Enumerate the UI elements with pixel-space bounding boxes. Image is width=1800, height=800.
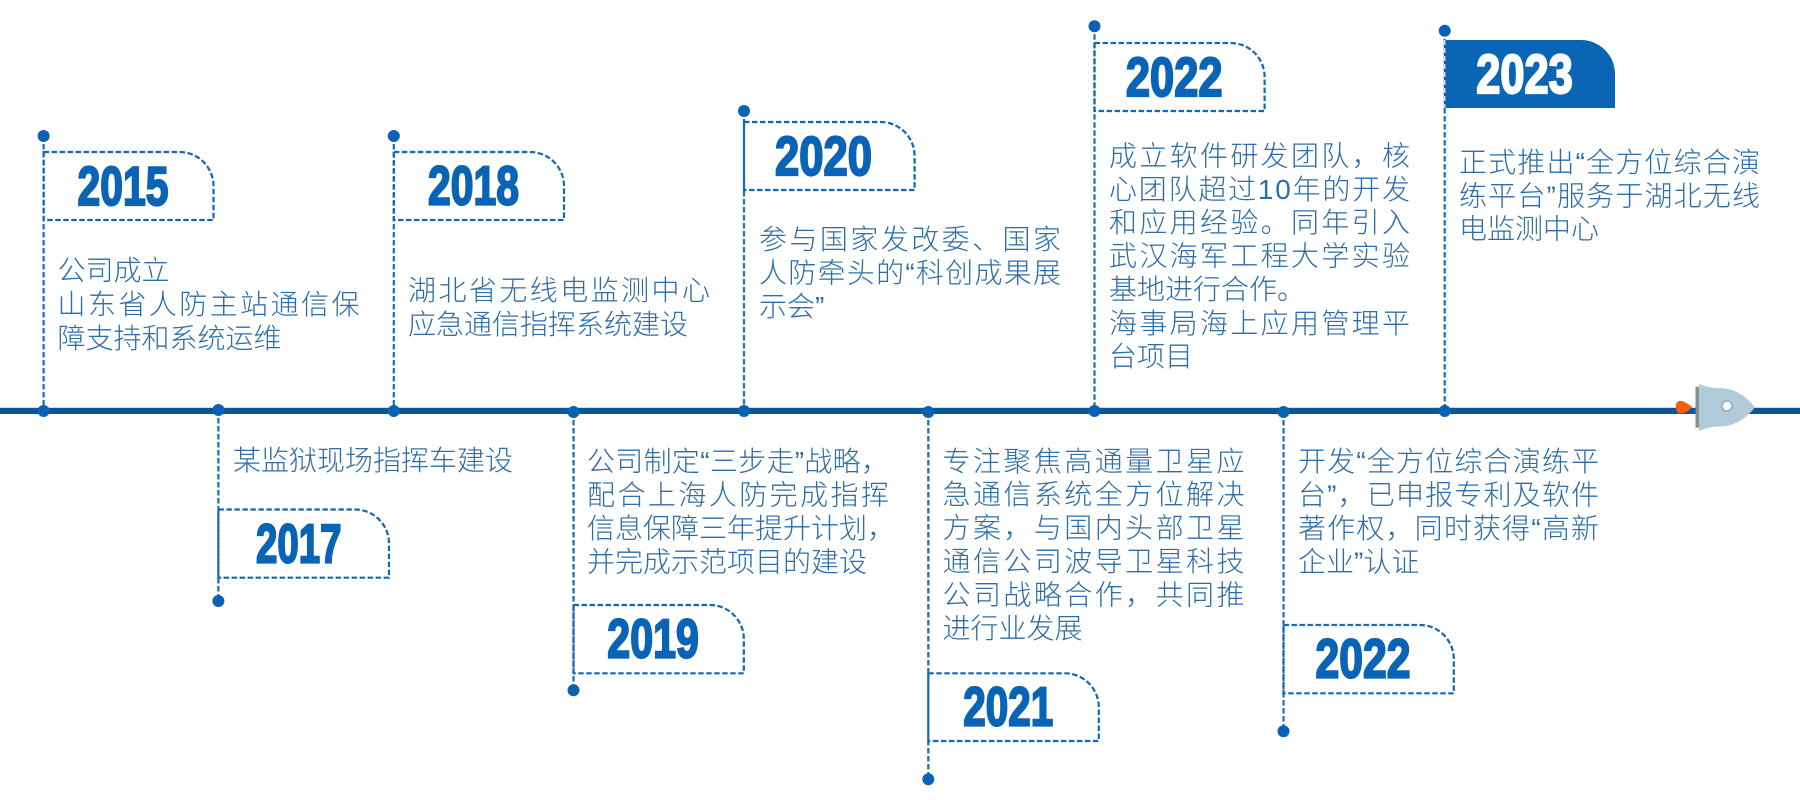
description: 2020: 参与国家发改委、国家 [759,224,1061,255]
description: 2019: 配合上海人防完成指挥 [587,480,889,510]
year: 2021: 2021 [963,676,1053,738]
flag: 2019 [574,605,744,673]
description: 2015: 山东省人防主站通信保 [58,289,360,320]
description: 2022 lower: 著作权，同时获得“高新 [1298,513,1599,544]
rocket body [1699,384,1755,431]
milestone: 2023 [1439,25,1760,417]
description: 2020: 示会” [759,291,824,322]
rocket window [1722,401,1732,411]
flag: 2023 [1444,40,1615,108]
milestone: 2022 lower [1278,406,1599,737]
rocket flame [1676,401,1692,413]
description: 2023: 正式推出“全方位综合演 [1459,147,1760,178]
description: 2022 upper [1109,140,1410,372]
description: 2015: 公司成立 [58,255,170,286]
description: 2019: 并完成示范项目的建设 [587,546,867,578]
flag: 2021 [928,673,1099,741]
description: 2019 [587,446,895,578]
year: 2019: 2019 [607,608,699,670]
description: 2021: 急通信系统全方位解决 [942,479,1244,510]
year: 2015: 2015 [78,155,168,217]
description: 2017: 某监狱现场指挥车建设 [233,445,513,476]
rocket base plate [1696,387,1699,428]
description: 2022 upper: 基地进行合作。 [1109,274,1305,305]
flag: 2017 [218,510,389,578]
description: 2021: 专注聚焦高通量卫星应 [942,446,1244,477]
year: 2017: 2017 [256,512,342,574]
description: 2022 lower: 企业”认证 [1298,546,1419,578]
flag: 2022 upper [1094,43,1265,111]
milestone: 2022 upper [1088,20,1410,417]
description: 2022 upper: 和应用经验。同年引入 [1109,207,1410,238]
description: 2022 lower: 开发“全方位综合演练平 [1298,446,1599,477]
description: 2022 upper: 心团队超过10年的开发 [1109,174,1410,205]
milestone: 2019 [568,406,895,696]
description: 2023: 练平台”服务于湖北无线 [1459,180,1760,212]
description: 2022 upper: 海事局海上应用管理平 [1109,308,1410,339]
description: 2020 [759,224,1061,322]
description: 2021: 进行业发展 [942,613,1083,644]
year: 2022 upper: 2022 [1126,46,1222,108]
description: 2019: 信息保障三年提升计划， [587,513,895,544]
description: 2022 upper: 成立软件研发团队，核 [1109,140,1410,172]
milestone: 2015 [38,130,359,417]
description: 2020: 人防牵头的“科创成果展 [759,258,1061,288]
flag: 2018 [394,152,564,220]
description: 2021 [942,446,1244,644]
description: 2023 [1459,147,1760,244]
milestone: 2020 [738,105,1061,417]
description: 2015: 障支持和系统运维 [58,323,282,354]
year: 2018: 2018 [428,154,519,216]
description: 2018 [408,275,710,340]
description: 2021: 通信公司波导卫星科技 [942,546,1244,577]
description: 2019: 公司制定“三步走”战略， [587,446,889,477]
description: 2018: 应急通信指挥系统建设 [408,309,688,340]
description: 2015 [58,255,360,354]
description: 2022 upper: 台项目 [1109,341,1193,372]
main timeline axis [0,408,1800,414]
description: 2021: 公司战略合作，共同推 [942,580,1244,610]
description: 2022 upper: 武汉海军工程大学实验 [1109,240,1410,272]
description: 2022 lower [1298,446,1599,578]
year: 2022 lower: 2022 [1316,628,1410,690]
description: 2021: 方案，与国内头部卫星 [942,512,1244,544]
flag: 2022 lower [1284,625,1454,693]
icon: rocket [1676,384,1755,431]
milestone: 2017 [212,404,513,607]
description: 2018: 湖北省无线电监测中心 [408,275,710,306]
milestone: 2018 [388,130,710,417]
flag: 2015 [44,152,213,220]
year: 2020: 2020 [775,125,872,187]
flag: 2020 [744,122,915,190]
year: 2023: 2023 [1476,43,1573,105]
description: 2023: 电监测中心 [1459,214,1599,244]
description: 2022 lower: 台”，已申报专利及软件 [1298,480,1599,510]
milestone: 2021 [922,406,1244,785]
